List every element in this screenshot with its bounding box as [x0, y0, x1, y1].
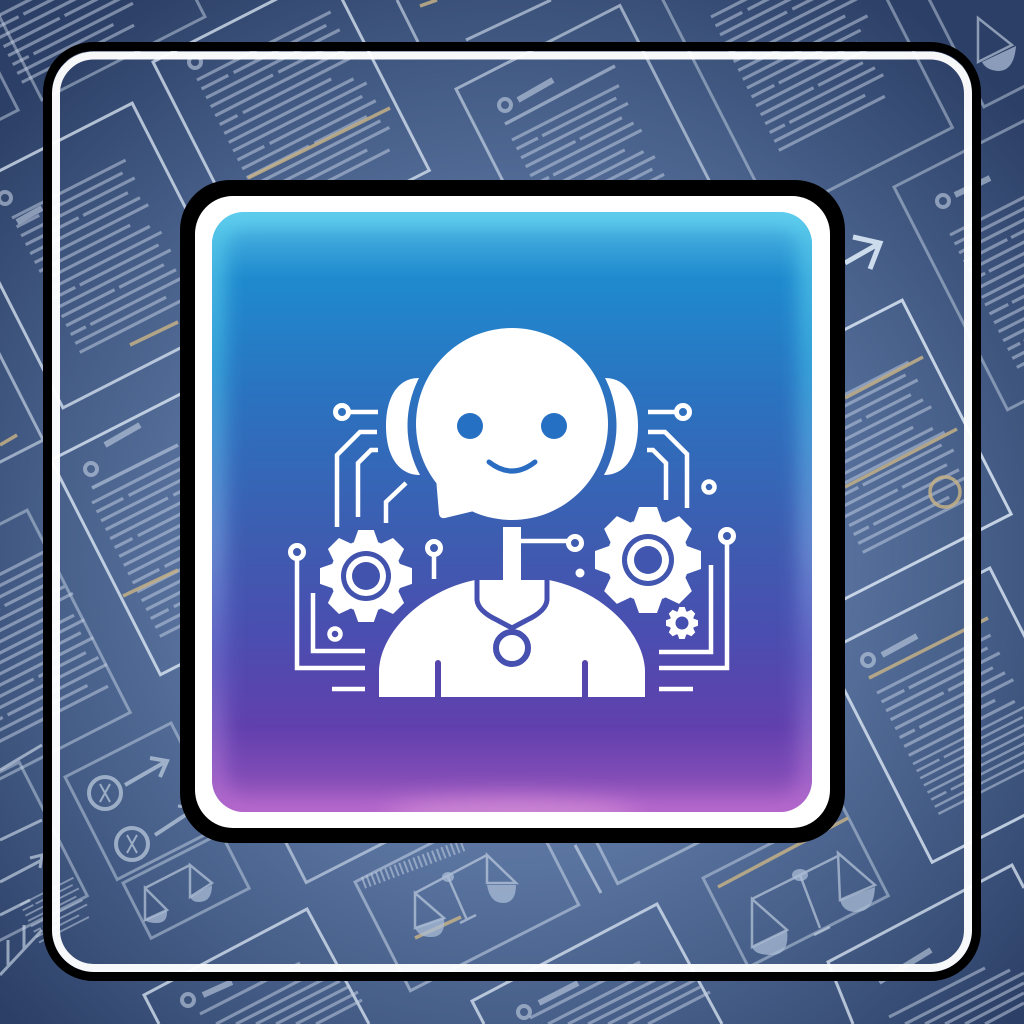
gear left — [320, 530, 412, 622]
central panel frame — [180, 180, 845, 843]
arrow: light arrow right of panel — [845, 237, 880, 269]
gear right — [595, 507, 701, 613]
dot — [576, 568, 584, 578]
balance scales — [145, 18, 1016, 955]
circuit traces right — [521, 406, 734, 689]
body — [379, 580, 645, 697]
collar — [477, 580, 547, 628]
coat seams — [438, 663, 585, 697]
gear small — [666, 607, 698, 639]
neck — [503, 527, 521, 583]
eyes — [457, 413, 483, 439]
text rows — [197, 12, 362, 142]
arrow doc icons — [0, 758, 194, 975]
central gradient panel — [212, 212, 812, 838]
smile — [489, 462, 535, 471]
pendant — [496, 632, 528, 664]
circuit traces left — [290, 406, 440, 689]
ruler ticks — [363, 845, 464, 883]
robot assistant icon — [290, 328, 734, 697]
speech-bubble head — [416, 328, 608, 520]
headphones — [386, 378, 638, 475]
